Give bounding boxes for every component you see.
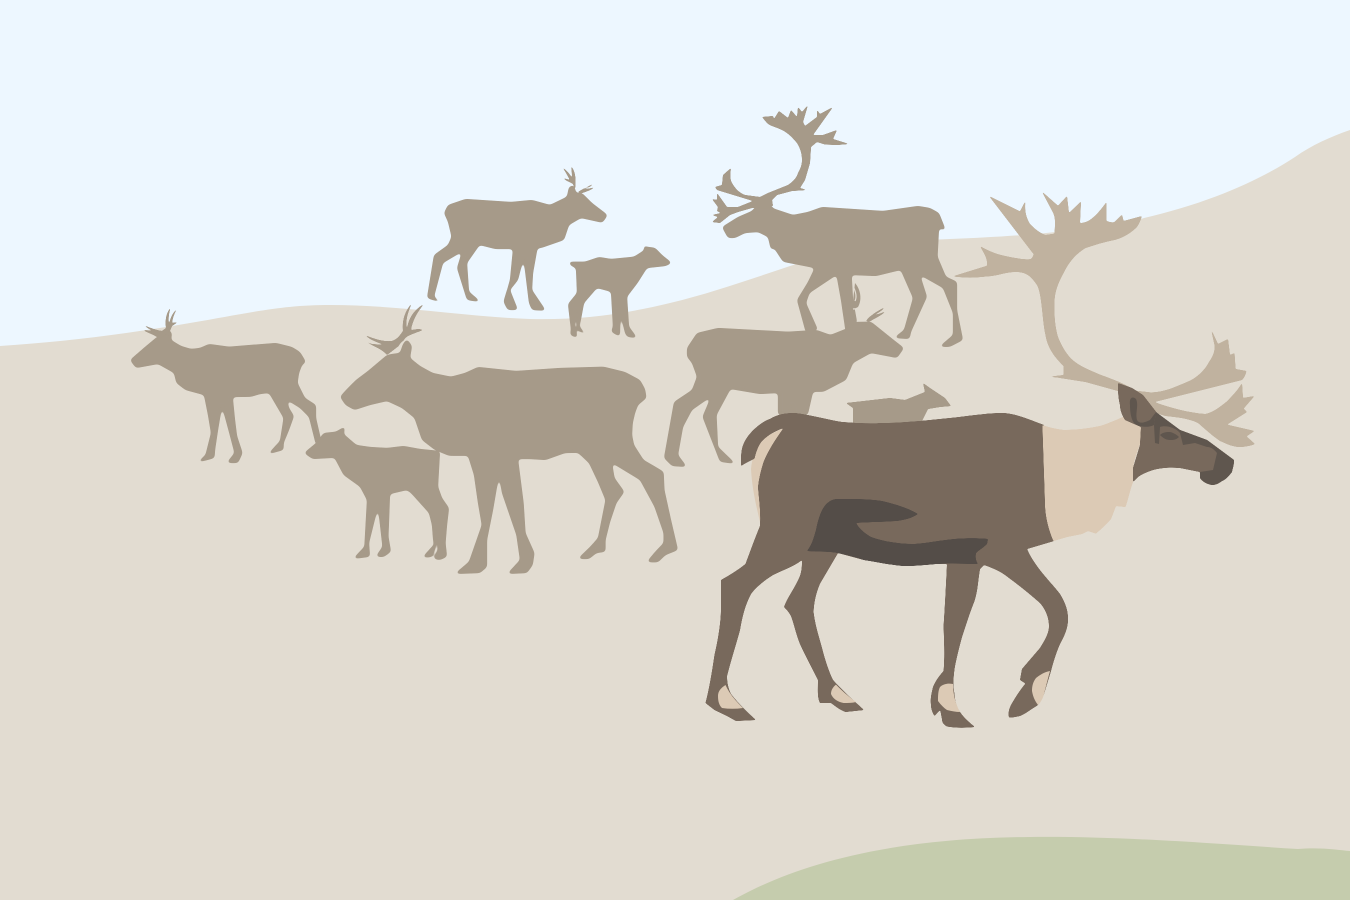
- ear marking dark: [1130, 397, 1156, 427]
- caribou: standing calf left: [304, 426, 449, 560]
- head markings dark: [1154, 412, 1234, 485]
- antlers: right doe: [866, 307, 886, 322]
- hoof patch: rear right: [831, 685, 856, 703]
- green foreground patch: [733, 837, 1350, 900]
- head: [1118, 383, 1234, 485]
- hoof patch: front right: [1032, 671, 1050, 705]
- caribou: walking calf upper: [568, 243, 672, 338]
- caribou: large bull: [712, 105, 963, 347]
- ear line: right doe: [853, 286, 864, 318]
- antlers: left doe: [143, 307, 178, 339]
- shoulder cape pale: [1042, 416, 1141, 541]
- caribou: distant doe partly hidden: [846, 383, 951, 425]
- antlers: large doe: [365, 303, 424, 355]
- caribou: large doe: [340, 303, 678, 574]
- antler overlap detail: large bull and right doe: [852, 283, 860, 310]
- tail underside pale: [751, 428, 784, 522]
- hoof patch: front left: [938, 684, 960, 712]
- eye: [1160, 432, 1179, 440]
- hoof patch: rear left: [718, 685, 743, 709]
- caribou: right doe: [664, 286, 904, 467]
- caribou: upper doe: [427, 166, 608, 311]
- antlers: large bull: [712, 105, 849, 223]
- ear line: large doe: [397, 339, 408, 353]
- dark flank saddle: [807, 499, 988, 566]
- caribou: left doe: [130, 307, 322, 463]
- background herd: [130, 105, 963, 574]
- antlers: upper doe: [562, 166, 595, 194]
- antlers: [953, 191, 1255, 447]
- foreground bull caribou: [706, 191, 1255, 728]
- body: [706, 413, 1068, 728]
